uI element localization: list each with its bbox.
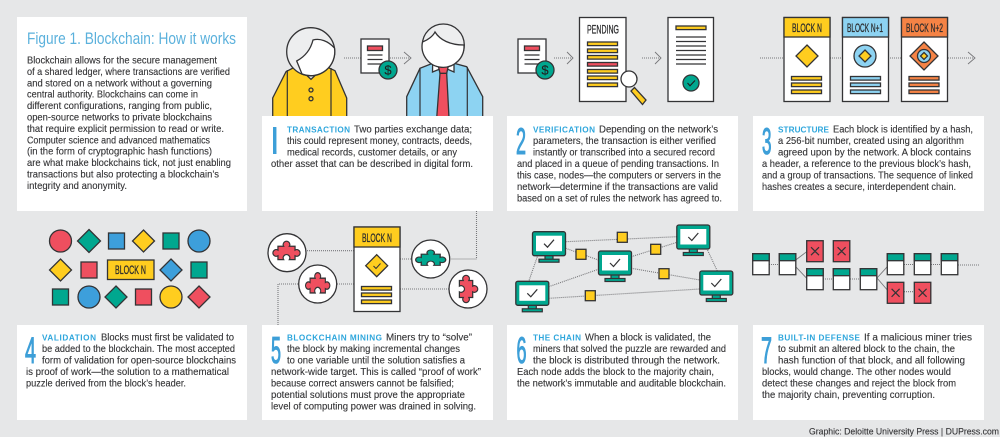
text: verification: parameters, the transaction is either verified bbox=[533, 136, 716, 147]
text: built-in defense: detect these changes and reject the block from bbox=[762, 379, 956, 390]
icon: man with tie bbox=[407, 24, 483, 118]
panel: 6 the chain bbox=[507, 325, 738, 420]
text: built-in defense bbox=[762, 333, 972, 401]
text: structure: Each block is identified by a hash, bbox=[833, 124, 973, 136]
connectors bbox=[278, 211, 476, 325]
intro text block bbox=[27, 56, 231, 192]
text: built-in defense: hash function of that block, and all following bbox=[778, 356, 965, 367]
text: the chain: THE CHAIN bbox=[533, 334, 581, 343]
text: the chain: the block is distributed through the network. bbox=[533, 356, 720, 367]
numeral 4: 4 bbox=[25, 330, 36, 371]
icon: verified record bbox=[668, 18, 714, 102]
text: structure: hashes creates a secure, interdependent chain. bbox=[762, 182, 956, 193]
text: structure bbox=[762, 124, 973, 193]
illustration: validation shapes bbox=[50, 230, 210, 308]
panel: 7 built-in defense bbox=[753, 325, 984, 420]
intro text block: Blockchain allows for the secure management bbox=[27, 56, 217, 66]
icon: block N+1: BLOCK N+1 bbox=[847, 21, 883, 35]
icon: document with coin: $ bbox=[541, 62, 549, 78]
text: verification: VERIFICATION bbox=[533, 126, 595, 134]
intro text block: that require explicit permission to read or write. bbox=[27, 124, 224, 135]
intro text block: integrity and anonymity. bbox=[27, 181, 127, 192]
panel: 2 verification bbox=[507, 116, 738, 211]
block N label: BLOCK N bbox=[115, 263, 146, 277]
icons: yellow blocks bbox=[576, 232, 669, 301]
text: the chain: miners that solved the puzzle are rewarded and bbox=[533, 344, 726, 355]
text: structure: STRUCTURE bbox=[778, 126, 830, 134]
title: Figure 1. Blockchain: How it works bbox=[27, 29, 236, 48]
text: validation: form of validation for open-source blockchains bbox=[42, 356, 236, 367]
intro text block: are what make blockchains tick, not just enabling bbox=[27, 158, 231, 169]
numeral 7: 7 bbox=[761, 330, 772, 371]
text: blockchain mining: the block by making incremental changes bbox=[287, 344, 460, 355]
illustration: transaction between two parties bbox=[273, 24, 483, 118]
text: blockchain mining: level of computing power was drained in solving. bbox=[271, 402, 476, 413]
intro text block: (in the form of cryptographic hash functions) bbox=[27, 147, 212, 158]
text: the chain: Each node adds the block to the majority chain, bbox=[517, 367, 714, 378]
text: built-in defense: If a malicious miner tries bbox=[864, 333, 972, 344]
icon: document with coin bbox=[518, 39, 554, 79]
panel: 5 blockchain mining: 5 bbox=[271, 330, 281, 371]
text: verification: instantly or transcribed into a secured record bbox=[533, 148, 715, 158]
text: blockchain mining bbox=[271, 333, 482, 413]
text: validation: puzzle derived from the block’s header. bbox=[26, 379, 186, 390]
intro text block: transactions but also protecting a blockchain’s bbox=[27, 170, 219, 180]
illustration: network of nodes bbox=[516, 225, 733, 312]
panel: 3 structure bbox=[753, 116, 984, 211]
text: verification bbox=[517, 124, 722, 204]
illustration: verification bbox=[518, 18, 714, 104]
icons: rejected blocks bbox=[807, 241, 931, 303]
numeral 1 bbox=[273, 127, 276, 154]
text: validation bbox=[26, 333, 236, 390]
text: the chain: the network’s immutable and auditable blockchain. bbox=[517, 379, 726, 390]
intro text block: Computer science and advanced mathematics bbox=[27, 135, 210, 146]
icon: red puzzle piece bbox=[449, 270, 487, 308]
intro text block: open-source networks to private blockchains bbox=[27, 112, 212, 124]
icon: block N: BLOCK N bbox=[362, 231, 392, 245]
text: structure: a header, a reference to the previous block’s hash, bbox=[762, 159, 971, 170]
panel: 1 transaction bbox=[262, 116, 493, 211]
icon: red puzzle piece bbox=[268, 234, 306, 272]
text: blockchain mining: Miners try to “solve” bbox=[386, 333, 473, 344]
intro text block: different configurations, ranging from public, bbox=[27, 101, 212, 112]
text: validation: VALIDATION bbox=[42, 334, 96, 343]
arrow bbox=[554, 52, 573, 64]
illustration: mining puzzle pieces bbox=[268, 211, 487, 325]
icons: monitors bbox=[516, 225, 733, 312]
icon: pending list with magnifier: PENDING bbox=[587, 22, 619, 36]
text: built-in defense: BUILT-IN DEFENSE bbox=[778, 334, 861, 343]
block N label bbox=[108, 260, 154, 280]
icon: block N+2: BLOCK N+2 bbox=[906, 21, 943, 35]
text: blockchain mining: because correct answers cannot be falsified; bbox=[271, 379, 454, 390]
text: built-in defense: blocks, would change. The other nodes would bbox=[762, 367, 951, 378]
intro text block: central authority. Blockchains can come in bbox=[27, 90, 198, 101]
intro text block: and stored on a network without a governing bbox=[27, 78, 212, 89]
illustration: built-in defense chain bbox=[753, 241, 980, 303]
panel: 6 the chain: 6 bbox=[516, 330, 526, 371]
text: transaction: Two parties exchange data; bbox=[354, 124, 472, 136]
intro text block: of a shared ledger, where transactions are verified bbox=[27, 67, 230, 78]
icon: block N bbox=[354, 227, 400, 312]
text: verification: this case, nodes—the computers or servers in the bbox=[517, 170, 721, 181]
icon: document with dollar coin bbox=[361, 39, 397, 79]
icon: block N+1 bbox=[842, 18, 888, 102]
text: transaction: medical records, customer details, or any bbox=[287, 148, 458, 158]
panel: 3 structure: 3 bbox=[762, 121, 772, 162]
numeral 1: 1 bbox=[266, 121, 282, 162]
text: verification: Depending on the network’s bbox=[599, 124, 718, 136]
text: built-in defense: the majority chain, preventing corruption. bbox=[762, 390, 935, 401]
icons: valid blocks bbox=[753, 254, 958, 290]
links bbox=[769, 264, 980, 292]
panel: introduction bbox=[17, 17, 247, 211]
panel: 2 verification: 2 bbox=[516, 121, 526, 162]
text: verification: network—determine if the transactions are valid bbox=[517, 182, 718, 193]
text: verification: and placed in a queue of pending transactions. In bbox=[517, 159, 719, 170]
text: verification: based on a set of rules the network has agreed to. bbox=[517, 193, 722, 204]
text: transaction bbox=[271, 124, 473, 170]
text: structure: and a group of transactions. The sequence of linked bbox=[762, 170, 973, 181]
text: transaction: TRANSACTION bbox=[287, 126, 350, 134]
arrow: transaction flow bbox=[344, 52, 411, 64]
text: validation: is proof of work—the solution to a mathematical bbox=[26, 367, 229, 378]
arrow: chain line bbox=[760, 52, 975, 64]
icon: red puzzle piece bbox=[299, 265, 337, 303]
text: validation: be added to the blockchain. The most accepted bbox=[42, 344, 235, 355]
icon: document with dollar coin: $ bbox=[384, 62, 392, 78]
text: blockchain mining: BLOCKCHAIN MINING bbox=[287, 334, 382, 343]
icon: pending list with magnifier bbox=[580, 18, 646, 104]
text: blockchain mining: network-wide target. This is called “proof of work” bbox=[271, 367, 482, 378]
text: structure: a 256-bit number, created using an algorithm bbox=[778, 136, 964, 147]
text: blockchain mining: to one variable until the solution satisfies a bbox=[287, 356, 465, 367]
text: validation: Blocks must first be validated to bbox=[101, 333, 234, 344]
network links bbox=[529, 237, 717, 298]
text: structure: agreed upon by the network. A block contains bbox=[778, 148, 971, 158]
icon: block N+2 bbox=[902, 18, 948, 102]
arrow bbox=[642, 52, 661, 64]
panel: 4 validation bbox=[17, 325, 247, 420]
text: built-in defense: to submit an altered block to the chain, the bbox=[778, 344, 955, 355]
text: blockchain mining: potential solutions must prove the appropriate bbox=[271, 390, 465, 401]
text: transaction: this could represent money, contracts, deeds, bbox=[287, 136, 472, 147]
panel: 5 blockchain mining bbox=[262, 325, 493, 420]
text: the chain bbox=[517, 333, 726, 390]
icon: woman bbox=[273, 28, 347, 118]
illustration: chain of blocks bbox=[760, 18, 975, 102]
icon: block N: BLOCK N bbox=[792, 21, 822, 35]
icon: block N bbox=[784, 18, 830, 102]
text: the chain: When a block is validated, the bbox=[585, 333, 711, 344]
icon: teal puzzle piece bbox=[412, 240, 450, 278]
text: transaction: other asset that can be described in digital form. bbox=[271, 159, 473, 170]
